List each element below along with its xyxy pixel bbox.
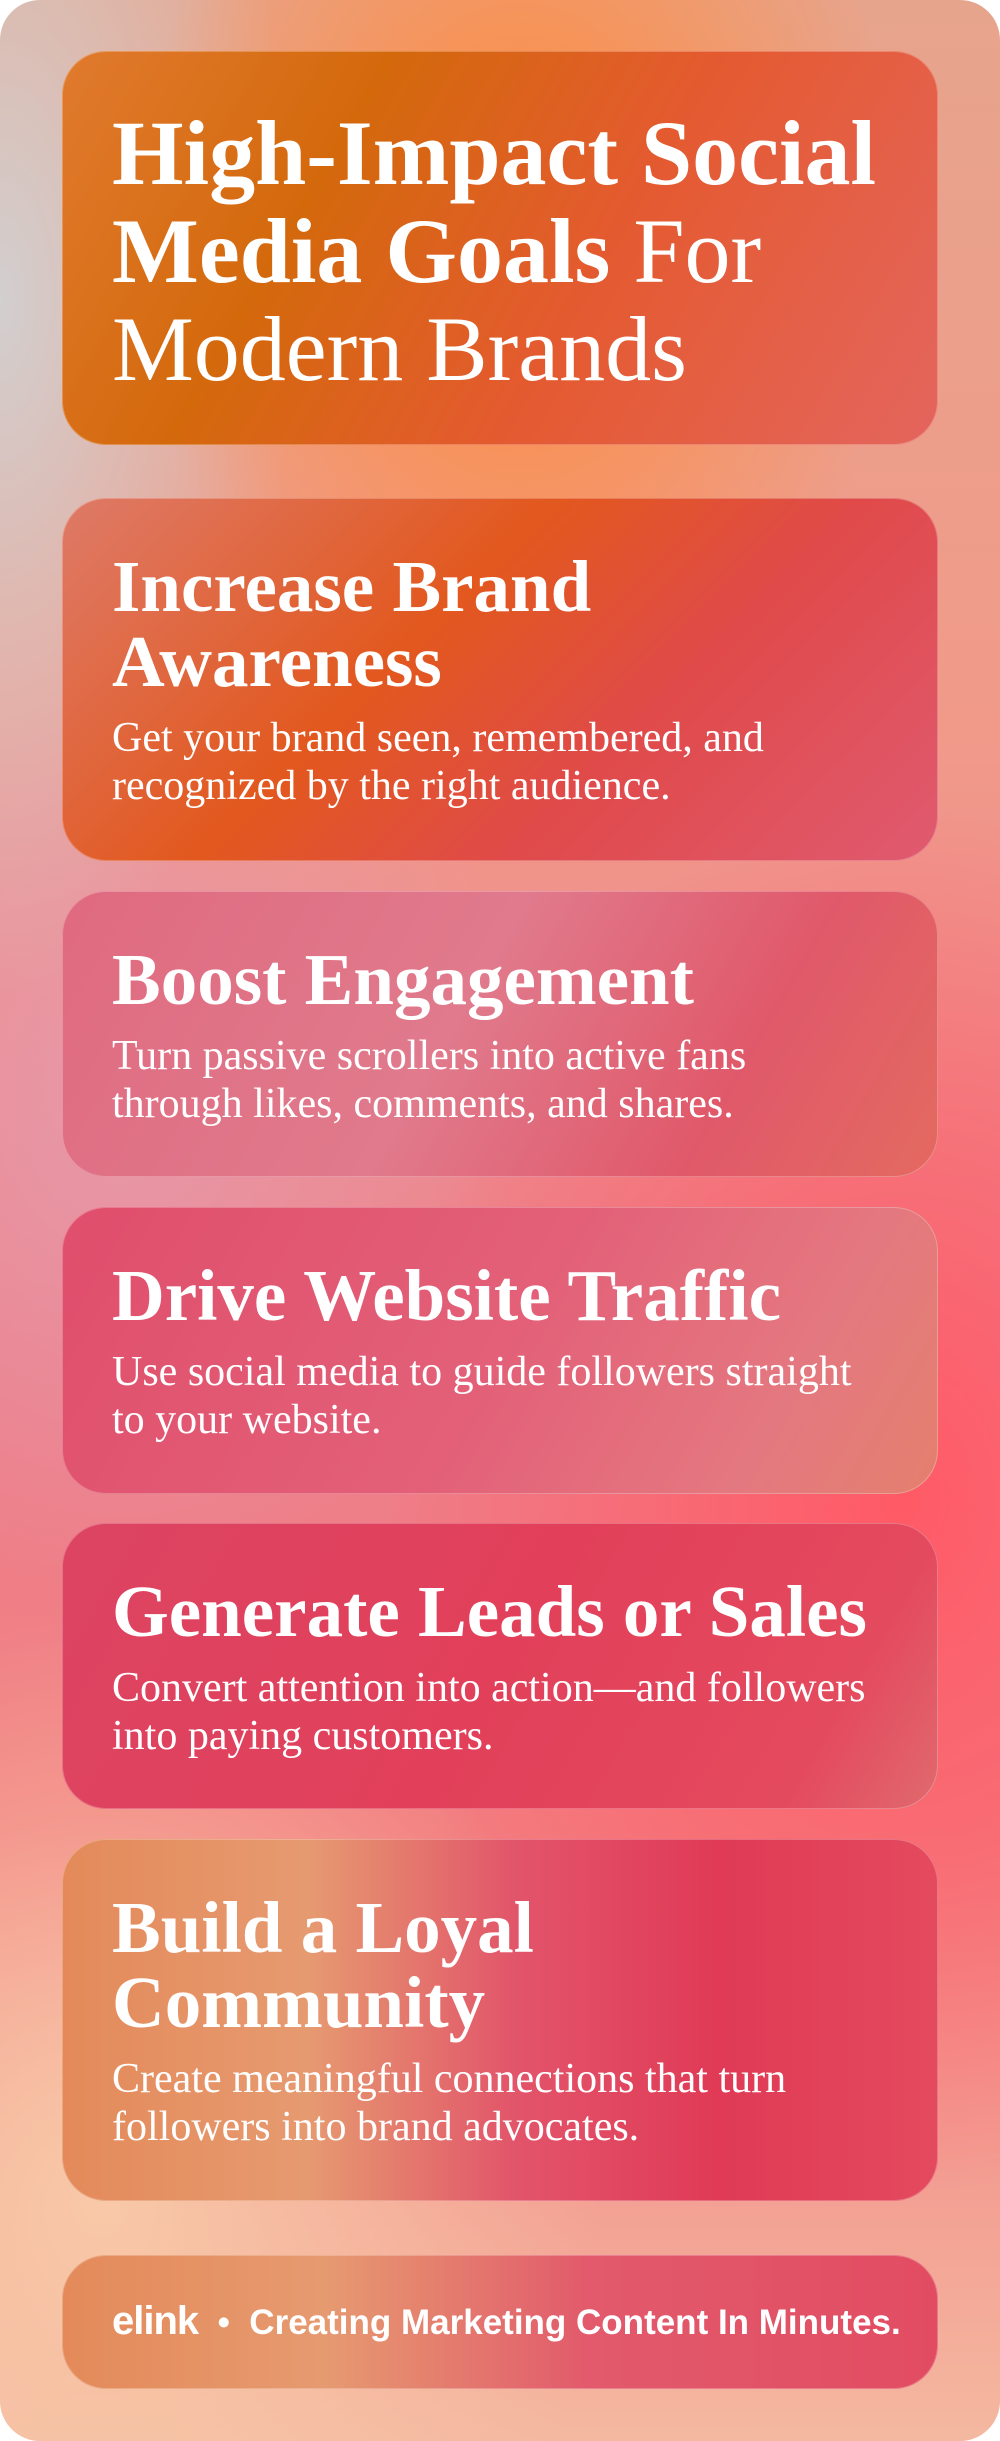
description xyxy=(112,1033,746,1127)
heading: Generate Leads or Sales xyxy=(112,1571,867,1652)
description: Convert attention into action—and followers xyxy=(112,1665,866,1711)
panel: generate leads or sales xyxy=(62,1523,938,1809)
description: Use social media to guide followers straight xyxy=(112,1349,852,1395)
heading: Build a Loyal xyxy=(112,1887,534,1968)
description: Turn passive scrollers into active fans xyxy=(112,1033,746,1079)
description xyxy=(112,715,764,809)
panel: increase brand awareness xyxy=(62,498,938,861)
heading: Boost Engagement xyxy=(112,939,694,1020)
description: to your website. xyxy=(112,1397,381,1443)
heading: Community xyxy=(112,1962,485,2043)
panel: drive website traffic xyxy=(62,1207,938,1494)
description: into paying customers. xyxy=(112,1713,493,1759)
heading xyxy=(112,1887,534,2043)
description: followers into brand advocates. xyxy=(112,2104,639,2150)
heading: Drive Website Traffic xyxy=(112,1255,781,1336)
title: High-Impact Social xyxy=(112,102,876,204)
title: Media Goals For xyxy=(112,200,761,302)
description: recognized by the right audience. xyxy=(112,763,671,809)
description xyxy=(112,2056,786,2150)
title card xyxy=(62,51,938,445)
heading: Increase Brand xyxy=(112,546,591,627)
description: Get your brand seen, remembered, and xyxy=(112,715,764,761)
footer text: elink • Creating Marketing Content In Minutes. xyxy=(112,2299,901,2343)
title xyxy=(112,102,876,400)
heading xyxy=(112,546,591,702)
description: Create meaningful connections that turn xyxy=(112,2056,786,2102)
panel: boost engagement xyxy=(62,891,938,1177)
description xyxy=(112,1349,852,1443)
panel: build a loyal community xyxy=(62,1839,938,2201)
title: Modern Brands xyxy=(112,298,687,400)
description xyxy=(112,1665,866,1759)
heading: Awareness xyxy=(112,621,442,702)
description: through likes, comments, and shares. xyxy=(112,1081,734,1127)
footer xyxy=(62,2255,938,2389)
